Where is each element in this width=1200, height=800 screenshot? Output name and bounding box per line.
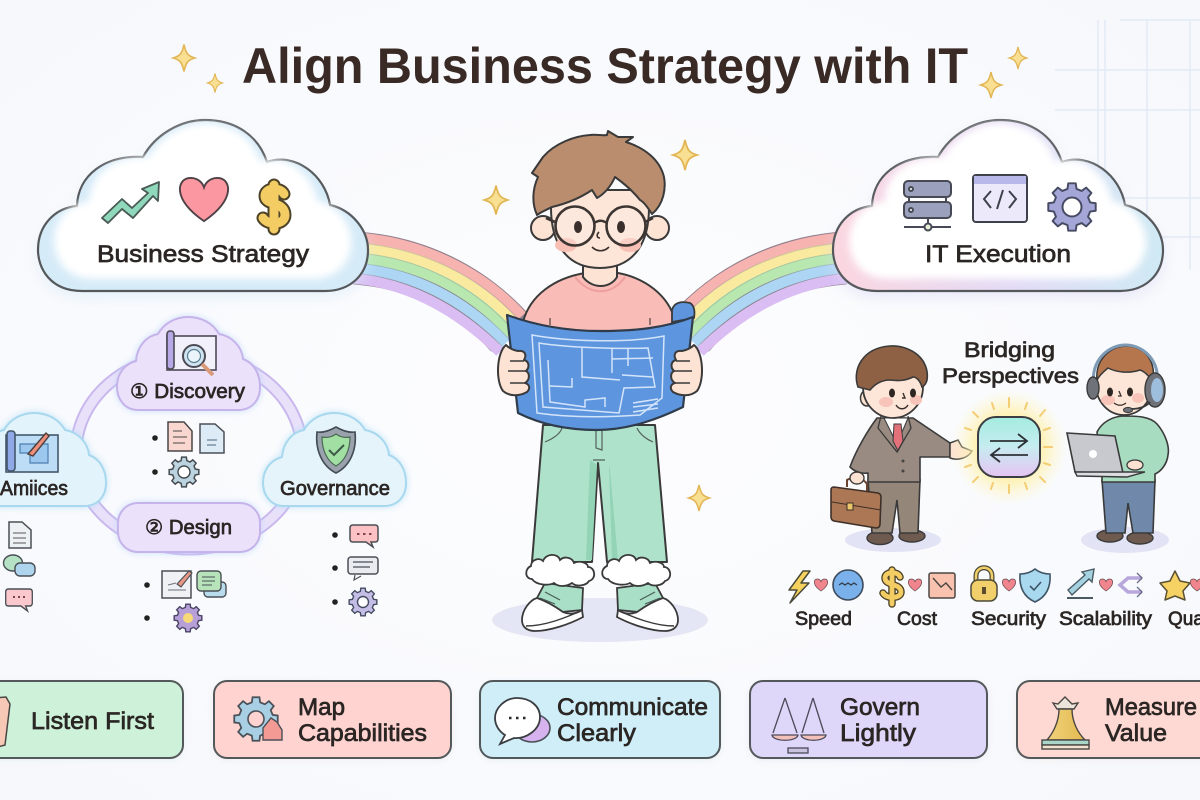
sweater (523, 273, 675, 345)
metric: cost (883, 570, 955, 630)
briefcase (847, 478, 867, 491)
metric: scalability: Scalability (1059, 609, 1153, 630)
label: Measure (1105, 694, 1197, 721)
trousers (868, 480, 920, 533)
label: Governance (280, 478, 390, 500)
rainbow left (350, 238, 522, 352)
sweater (1097, 416, 1168, 482)
metric: cost: Cost (897, 609, 938, 630)
card: listen first (0, 681, 183, 759)
icon: chat grey (348, 557, 378, 580)
head (1096, 355, 1152, 415)
label: Amiices (0, 478, 68, 500)
head (860, 390, 874, 406)
cloud: governance (263, 413, 406, 506)
label: Listen First (31, 708, 154, 735)
title: Align Business Strategy with IT (242, 38, 968, 94)
eyes, nose, mouth (574, 221, 625, 251)
list: governance items (332, 525, 378, 616)
rainbow right (678, 238, 850, 352)
label: Communicate (557, 694, 708, 721)
hand (950, 440, 972, 459)
jacket (850, 418, 950, 482)
label: ② Design (145, 517, 232, 539)
icon: blueprint and pencil (6, 431, 58, 472)
cloud: business strategy (38, 120, 368, 297)
faint blueprint grid, top right (1055, 20, 1200, 270)
card: communicate clearly (480, 681, 720, 759)
neck (583, 262, 617, 286)
shirt and tie (884, 418, 908, 444)
card: govern lightly (750, 681, 987, 759)
laptop (1067, 433, 1123, 473)
metric: scalability (1059, 569, 1153, 630)
card: measure value: Value (1105, 720, 1167, 747)
icon: blueprint and magnifier (167, 331, 216, 375)
left shoe (522, 583, 583, 631)
icon: chat pink (6, 589, 32, 611)
card: map capabilities (214, 681, 451, 759)
icon: chat bubbles (4, 555, 35, 576)
decorative sparkles (173, 44, 1027, 511)
list: discovery items (152, 422, 224, 487)
blueprint floor plan (532, 335, 664, 417)
heading: bridging perspectives: Perspectives (942, 365, 1079, 388)
heading: bridging perspectives (942, 339, 1079, 388)
metric: security: Security (971, 609, 1047, 630)
hair (532, 131, 665, 215)
cloud: IT execution (833, 120, 1163, 297)
icon: sketch pencil (162, 571, 192, 598)
person: central figure with blueprint (492, 131, 708, 642)
icon: gear (1048, 183, 1096, 231)
list: design items (144, 571, 226, 632)
label: Map (298, 694, 345, 721)
icon: dollar (263, 185, 285, 229)
icon: flower gear (174, 604, 202, 632)
icon: gear (234, 697, 282, 741)
icon: code window (973, 175, 1027, 222)
icon: exchange arrows with glow (951, 389, 1067, 505)
floor shadow (492, 598, 708, 642)
trousers (1102, 480, 1155, 533)
metric: speed: Speed (795, 609, 852, 630)
card: communicate clearly: Clearly (557, 720, 636, 747)
right shoe (617, 583, 678, 631)
metric: speed (789, 570, 863, 630)
card: govern lightly: Lightly (840, 720, 916, 747)
ears (531, 216, 555, 240)
card: map capabilities: Capabilities (298, 720, 427, 747)
icon: gear (349, 588, 377, 616)
label: Business Strategy (97, 241, 310, 268)
icon: chess piece (1042, 697, 1089, 749)
face (551, 190, 649, 268)
icon: document blue (200, 424, 224, 453)
cloud: discovery (117, 317, 260, 410)
icon: chat pink (350, 525, 378, 547)
shoes (867, 532, 893, 544)
icon: gear (169, 457, 199, 487)
blueprint roll (672, 302, 695, 322)
heading: bridging perspectives: Bridging (964, 339, 1055, 362)
label: IT Execution (925, 241, 1071, 268)
icon: scales (772, 698, 826, 753)
icon: hand (0, 697, 10, 748)
cycle: process ring (76, 355, 302, 549)
right hand (671, 345, 702, 395)
icon: growth arrow (102, 182, 159, 223)
card: measure value (1017, 681, 1200, 759)
icon: heart (180, 178, 228, 221)
icon: speech bubbles (495, 698, 550, 744)
fluffy cuffs (526, 555, 594, 586)
icon: document (168, 422, 192, 451)
metric: security (971, 568, 1050, 630)
metric: quality (1160, 571, 1200, 630)
icon: chat note (197, 571, 226, 597)
figure: businessman (831, 346, 972, 552)
label: ① Discovery (130, 381, 245, 403)
label: Govern (840, 694, 920, 721)
blueprint sheet (507, 315, 693, 430)
pill: design (118, 503, 260, 552)
glasses (546, 206, 653, 246)
icon: document (9, 522, 31, 548)
left hand (498, 345, 529, 395)
cloud: services (0, 413, 106, 506)
figure: IT worker (1067, 345, 1169, 553)
shoes (1097, 530, 1123, 542)
icon: server (904, 181, 951, 230)
trousers (532, 425, 667, 562)
headset (1093, 345, 1157, 384)
list: services items (4, 522, 35, 611)
icon: shield (317, 427, 355, 473)
